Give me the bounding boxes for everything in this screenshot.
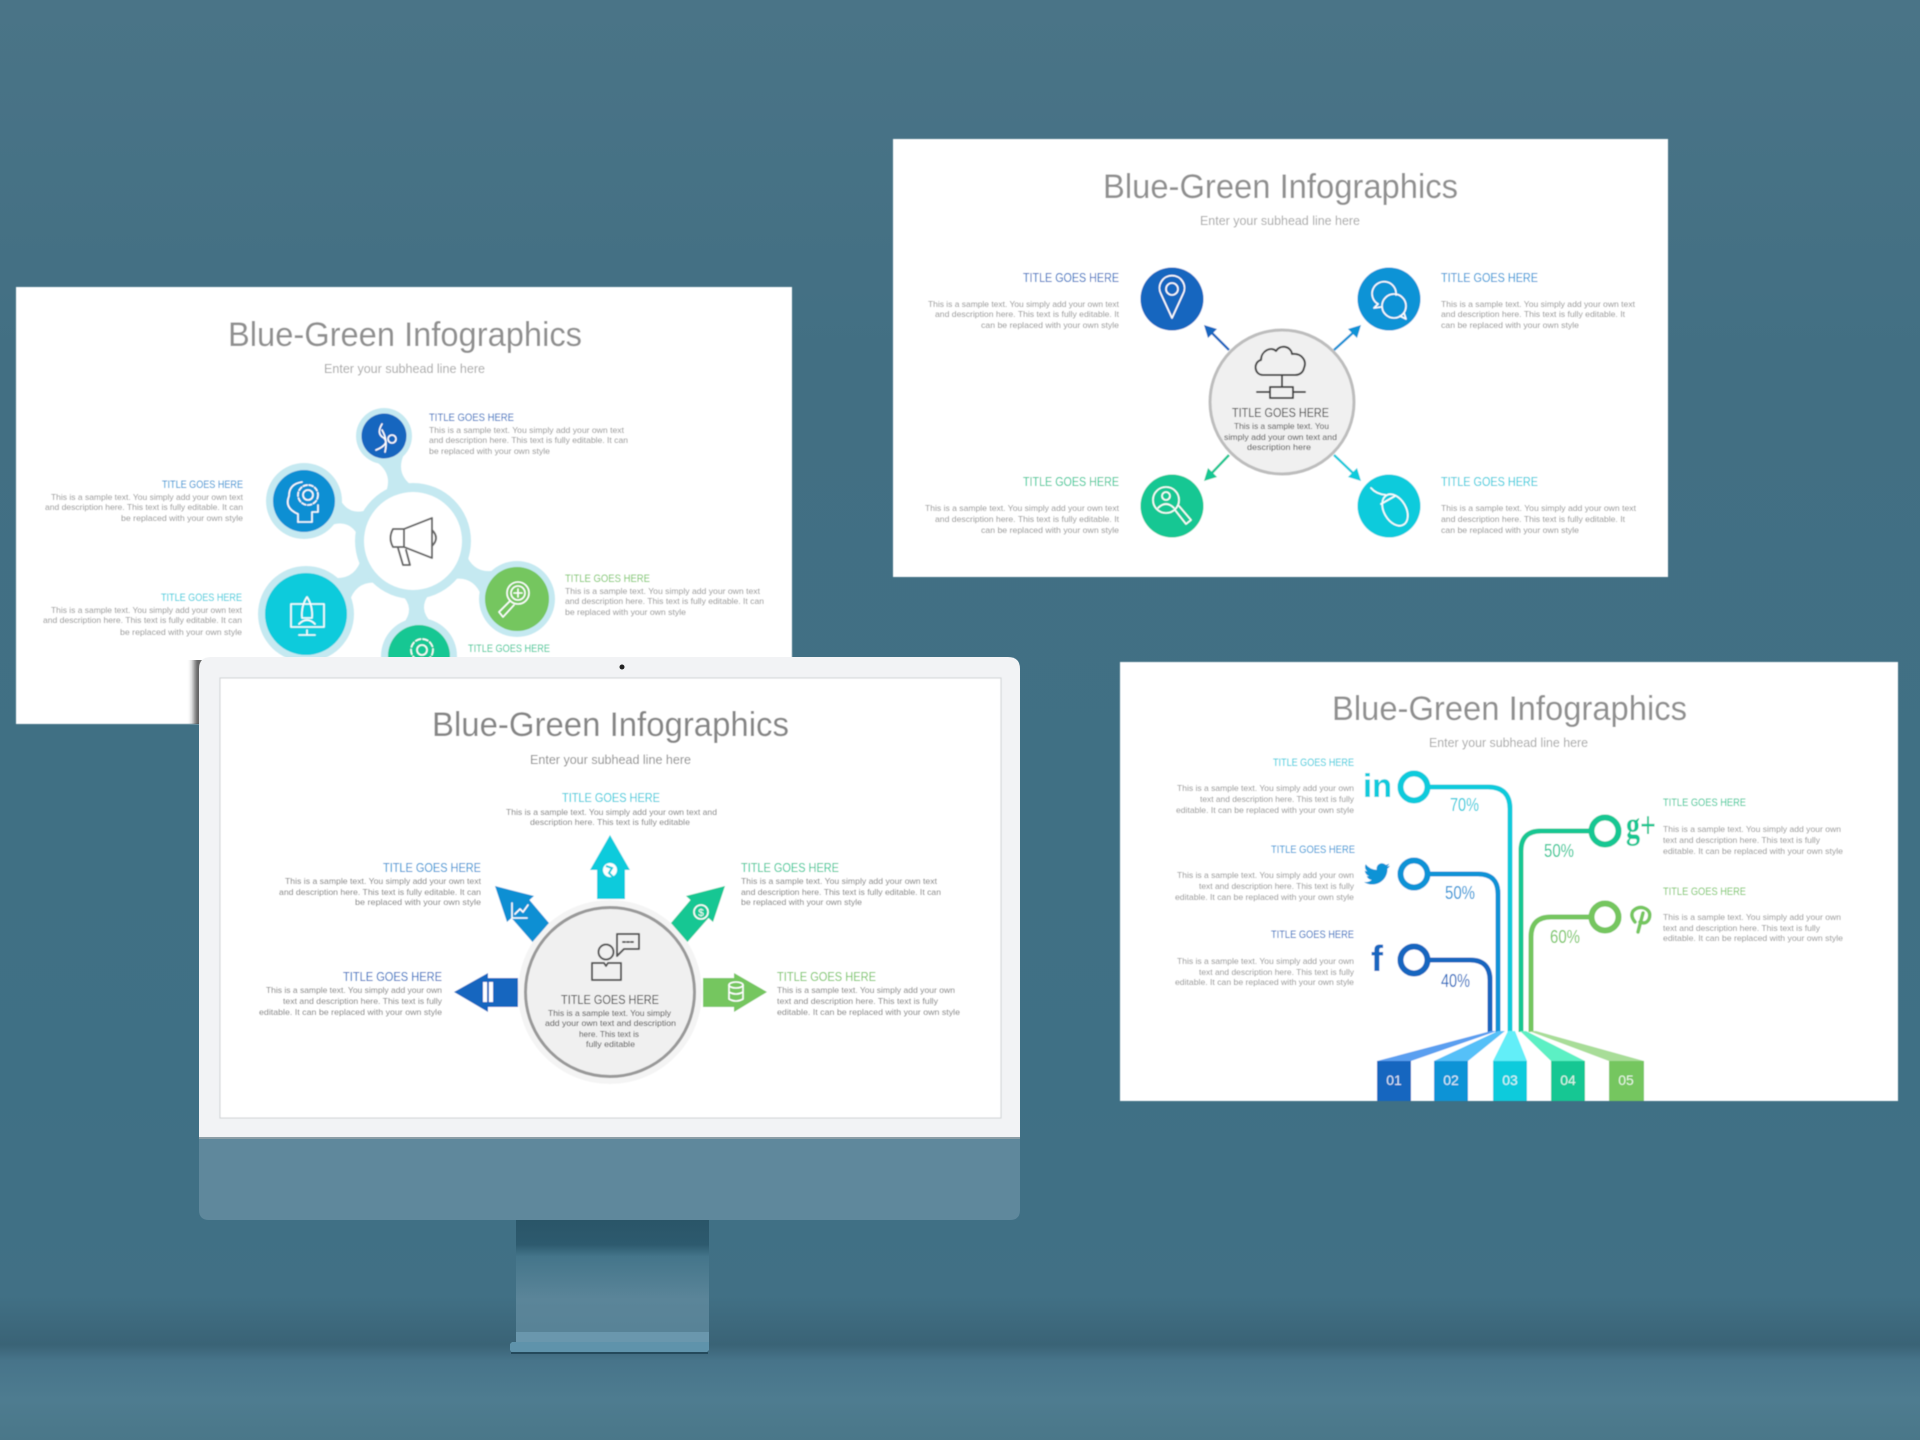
item: upper-left label: TITLE GOES HERE — [383, 860, 481, 875]
icon: google plus: g+ — [1626, 805, 1656, 847]
item: left label — [259, 969, 443, 1017]
item: linkedin label — [1176, 757, 1355, 815]
percent labels: 50% — [1445, 883, 1475, 903]
item: linkedin label: text and description here. This text is fully — [1200, 794, 1355, 804]
item: google plus label: editable. It can be replaced with your own style — [1663, 846, 1843, 856]
item: bottom-left label: can be replaced with your own style — [981, 525, 1119, 535]
item: right label: This is a sample text. You simply add your own text — [565, 586, 761, 596]
item: google plus label: TITLE GOES HERE — [1663, 797, 1746, 809]
icon: cloud network — [1256, 347, 1305, 398]
item: facebook label: TITLE GOES HERE — [1271, 929, 1354, 941]
item: lower-left label: This is a sample text. You simply add your own text — [51, 605, 243, 615]
item: facebook label — [1175, 929, 1355, 987]
slide subhead: Enter your subhead line here — [530, 752, 691, 767]
item: right label: and description here. This text is fully editable. It can — [565, 596, 764, 606]
node: mouse — [1358, 474, 1420, 538]
item: pinterest label: This is a sample text. You simply add your own — [1663, 912, 1841, 922]
item: lower-left label: be replaced with your own style — [120, 627, 242, 637]
arrow: right — [703, 973, 767, 1012]
item: left label: TITLE GOES HERE — [162, 479, 243, 491]
hub text — [1224, 421, 1337, 452]
arrows — [1204, 325, 1361, 481]
slide title: Blue-Green Infographics — [1332, 690, 1687, 728]
item: google plus label: This is a sample text. You simply add your own — [1663, 824, 1841, 834]
numbered bars: 01 — [1386, 1072, 1402, 1088]
slide subhead: Enter your subhead line here — [1200, 213, 1360, 228]
item: top label: and description here. This text is fully editable. It can — [429, 435, 628, 445]
percent labels — [1441, 795, 1580, 991]
percent labels: 40% — [1441, 971, 1470, 991]
item: top-left label: and description here. This text is fully editable. It — [935, 309, 1120, 319]
item: pinterest label: TITLE GOES HERE — [1663, 886, 1746, 898]
item: bottom-right label: and description here. This text is fully editable. It — [1441, 514, 1626, 524]
item: pinterest label — [1663, 886, 1843, 943]
item: right label: be replaced with your own style — [565, 607, 686, 617]
icon: twitter — [1364, 863, 1390, 885]
panel: molecule slide (left) — [16, 287, 792, 724]
item: upper-right label: This is a sample text. You simply add your own text — [741, 876, 938, 886]
item: upper-right label: be replaced with your own style — [741, 897, 862, 907]
item: bottom-right label — [1441, 474, 1637, 535]
item: top label — [506, 790, 717, 827]
item: lower-left label: and description here. This text is fully editable. It can — [43, 615, 242, 625]
item: lower-left label — [43, 592, 243, 637]
item: top-left label: TITLE GOES HERE — [1023, 270, 1119, 285]
slide subhead: Enter your subhead line here — [1429, 735, 1588, 750]
item: right label — [777, 969, 960, 1017]
center text — [545, 1008, 676, 1049]
arrow: left — [454, 973, 518, 1012]
item: linkedin label: editable. It can be replaced with your own style — [1176, 805, 1354, 815]
item: facebook label: text and description here. This text is fully — [1199, 967, 1355, 977]
numbered bars: 03 — [1502, 1072, 1518, 1088]
item: upper-right label: TITLE GOES HERE — [741, 860, 839, 875]
item: twitter label: editable. It can be replaced with your own style — [1175, 892, 1354, 902]
item: upper-right label: and description here. This text is fully editable. It can — [741, 887, 941, 897]
item: top label: TITLE GOES HERE — [429, 412, 514, 424]
icon: plant — [376, 424, 396, 452]
numbered bars: 05 — [1618, 1072, 1634, 1088]
numbered bars: 02 — [1443, 1072, 1459, 1088]
item: upper-left label — [279, 860, 482, 907]
panel: screen with arrow slide — [220, 678, 1001, 1118]
item: top label: This is a sample text. You simply add your own text and — [506, 807, 717, 817]
item: top label: be replaced with your own style — [429, 446, 550, 456]
item: left label: This is a sample text. You simply add your own text — [51, 492, 244, 502]
slide title: Blue-Green Infographics — [432, 706, 789, 744]
icon: megaphone — [390, 518, 436, 565]
slide title: Blue-Green Infographics — [228, 316, 582, 354]
item: twitter label: This is a sample text. You simply add your own — [1177, 870, 1354, 880]
item: facebook label: This is a sample text. You simply add your own — [1177, 956, 1354, 966]
item: top label: TITLE GOES HERE — [562, 790, 660, 805]
item: right label: This is a sample text. You simply add your own — [777, 985, 955, 995]
item: twitter label: TITLE GOES HERE — [1271, 844, 1355, 856]
arrow: upper right — [671, 886, 725, 942]
item: linkedin label: This is a sample text. You simply add your own — [1177, 783, 1354, 793]
item: left label: text and description here. This text is fully — [283, 996, 443, 1006]
item: bottom-left label: This is a sample text. You simply add your own text — [925, 503, 1120, 513]
item: top-left label: This is a sample text. You simply add your own text — [928, 299, 1120, 309]
percent labels: 60% — [1550, 927, 1580, 947]
arrow: up — [590, 835, 630, 899]
item: google plus label — [1663, 797, 1843, 856]
item: linkedin label: TITLE GOES HERE — [1273, 757, 1354, 769]
percent labels: 70% — [1450, 795, 1479, 815]
monitor stand — [510, 1220, 709, 1354]
panel: hub and arrows slide (top right) — [893, 139, 1668, 577]
item: upper-left label: This is a sample text. You simply add your own text — [285, 876, 482, 886]
item: pinterest label: editable. It can be replaced with your own style — [1663, 933, 1843, 943]
node: search user — [1140, 474, 1204, 538]
item: right label: TITLE GOES HERE — [565, 573, 650, 585]
node: pin — [1140, 268, 1204, 330]
item: right label: TITLE GOES HERE — [777, 969, 876, 984]
item: pinterest label: text and description here. This text is fully — [1663, 923, 1821, 933]
slide title: Blue-Green Infographics — [1103, 168, 1458, 206]
rings — [1400, 774, 1618, 974]
icon: linkedin: in — [1363, 767, 1392, 804]
item: left label: and description here. This text is fully editable. It can — [45, 502, 243, 512]
item: bottom-left label: TITLE GOES HERE — [1023, 474, 1119, 489]
item: left label: be replaced with your own style — [121, 513, 243, 523]
item: right label: editable. It can be replaced with your own style — [777, 1007, 960, 1017]
item: bottom-right label: This is a sample text. You simply add your own text — [1441, 503, 1637, 513]
item: right label — [565, 573, 764, 617]
icon: gear — [411, 639, 433, 661]
item: upper-left label: be replaced with your own style — [355, 897, 481, 907]
item: bottom label: TITLE GOES HERE — [468, 643, 550, 655]
item: left label: TITLE GOES HERE — [343, 969, 442, 984]
icon: pinterest — [1632, 907, 1650, 932]
percent labels: 50% — [1544, 841, 1574, 861]
slide subhead: Enter your subhead line here — [324, 361, 485, 376]
hub title: TITLE GOES HERE — [1232, 405, 1329, 420]
hub text: This is a sample text. You — [1234, 421, 1329, 431]
center text: fully editable — [586, 1039, 635, 1049]
center hub — [1210, 330, 1354, 474]
item: upper-left label: and description here. This text is fully editable. It can — [279, 887, 481, 897]
item: left label: editable. It can be replaced with your own style — [259, 1007, 442, 1017]
icon: facebook: f — [1371, 938, 1384, 979]
center text: here. This text is — [579, 1029, 639, 1039]
item: top-right label: This is a sample text. You simply add your own text — [1441, 299, 1636, 309]
item: top-left label: can be replaced with your own style — [981, 320, 1119, 330]
item: upper-right label — [741, 860, 941, 907]
molecule diagram — [258, 408, 555, 694]
item: bottom-right label: TITLE GOES HERE — [1441, 474, 1538, 489]
item: top label — [429, 412, 628, 456]
arrow: upper left — [495, 886, 549, 942]
item: top label: description here. This text is fully editable — [530, 817, 690, 827]
item: left label — [45, 479, 244, 523]
center text: This is a sample text. You simply — [548, 1008, 672, 1018]
item: top label: This is a sample text. You simply add your own text — [429, 425, 625, 435]
item: twitter label — [1175, 844, 1355, 902]
item: twitter label: text and description here. This text is fully — [1199, 881, 1355, 891]
node: chat — [1358, 268, 1420, 330]
icon: person with bubble — [592, 934, 639, 980]
icon: magnifier plus — [499, 582, 529, 617]
numbered bars — [1377, 1031, 1644, 1101]
item: top-right label: and description here. This text is fully editable. It — [1441, 309, 1626, 319]
icon: head with gear — [288, 482, 318, 522]
center title: TITLE GOES HERE — [561, 992, 659, 1007]
item: google plus label: text and description here. This text is fully — [1663, 835, 1821, 845]
item: top-right label: TITLE GOES HERE — [1441, 270, 1538, 285]
item: bottom-left label: and description here. This text is fully editable. It — [935, 514, 1120, 524]
monitor — [194, 650, 1020, 1220]
numbered bars: 04 — [1560, 1072, 1576, 1088]
panel: social tree slide (bottom right) — [1120, 662, 1898, 1101]
item: top-right label — [1441, 270, 1636, 330]
item: top-right label: can be replaced with your own style — [1441, 320, 1579, 330]
item: top-left label — [928, 270, 1120, 330]
item: facebook label: editable. It can be replaced with your own style — [1175, 977, 1354, 987]
item: bottom-right label: can be replaced with your own style — [1441, 525, 1579, 535]
item: bottom-left label — [925, 474, 1120, 535]
item: left label: This is a sample text. You simply add your own — [266, 985, 442, 995]
hub text: description here — [1247, 442, 1311, 452]
icon: rocket on monitor — [291, 597, 324, 635]
center text: add your own text and description — [545, 1018, 676, 1028]
center circle — [518, 900, 702, 1084]
hub text: simply add your own text and — [1224, 432, 1337, 442]
item: right label: text and description here. This text is fully — [777, 996, 939, 1006]
tree lines — [1430, 787, 1589, 1032]
arrow: upper right: $ — [698, 908, 704, 919]
item: lower-left label: TITLE GOES HERE — [161, 592, 242, 604]
